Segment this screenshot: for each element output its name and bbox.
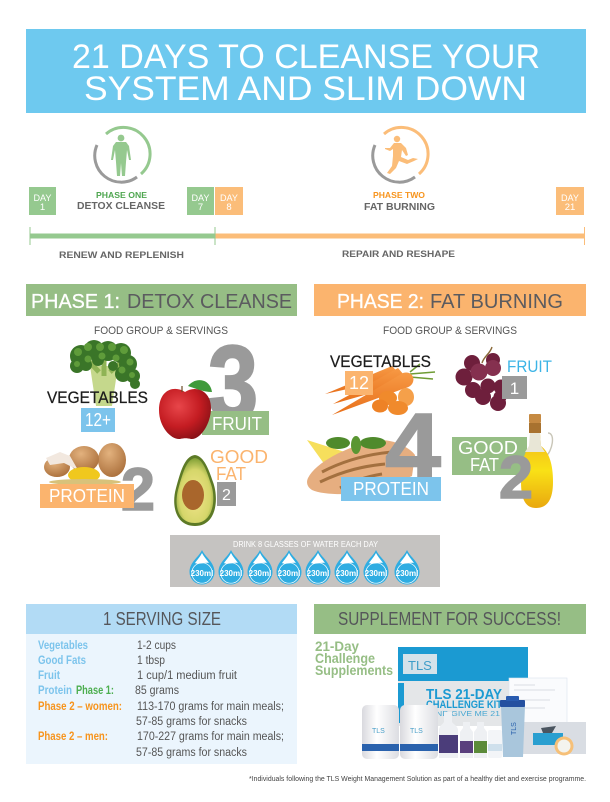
- title banner: SYSTEM AND SLIM DOWN: [84, 70, 527, 108]
- icon: water drop 4: 230ml: [278, 569, 300, 578]
- day 7 marker: DAY: [192, 193, 210, 204]
- icon: water drop 2: [218, 550, 244, 584]
- day 1 marker: [29, 187, 56, 215]
- serving table: 113-170 grams for main meals;: [137, 701, 284, 713]
- good fat label: FAT: [216, 464, 246, 484]
- icon: water drop 4: [276, 550, 302, 584]
- icon: grapes: [456, 347, 508, 411]
- icon: grilled chicken: [307, 436, 415, 494]
- product: protein tub 1: TLS: [372, 728, 385, 735]
- icon: water drop 5: [306, 550, 330, 584]
- heading: supplement: [314, 604, 586, 634]
- protein badge: PROTEIN: [353, 479, 429, 499]
- product: small bottles: [439, 712, 502, 758]
- day 1 marker: 1: [40, 202, 45, 213]
- panel: supplement for success: [314, 604, 586, 759]
- product: paperwork: [509, 678, 567, 723]
- serving table: Phase 1:: [76, 685, 114, 697]
- product: kit box: TLS 21-DAY: [426, 686, 502, 703]
- day 7 marker: 7: [198, 202, 203, 213]
- serving table: Protein: [38, 685, 72, 697]
- day 21 marker: DAY: [561, 193, 580, 204]
- icon: water drop 1: 230ml: [191, 569, 213, 578]
- serving table: Vegetables: [38, 640, 88, 652]
- day 7 marker: [187, 187, 214, 215]
- fruit badge: [202, 411, 269, 435]
- supplements caption: Supplements: [315, 662, 393, 678]
- 12+ badge: 12+: [85, 410, 111, 430]
- heading: phase 1: PHASE 1:: [31, 290, 120, 313]
- protein badge: PROTEIN: [49, 486, 125, 506]
- 12 badge: [345, 371, 373, 395]
- day 8 marker: [215, 187, 243, 215]
- heading: phase 1: [26, 284, 297, 316]
- fruit serving badge: 1: [510, 379, 519, 398]
- phase two label: PHASE TWO: [373, 190, 425, 200]
- footnote: *Individuals following the TLS Weight Management Solution as part of a healthy diet and exercise programme.: [249, 774, 586, 783]
- icon: water drop 7: [364, 550, 388, 584]
- icon: carrots: [325, 364, 435, 415]
- product: kit box: AND GIVE ME 21: [430, 711, 500, 718]
- heading: serving size: [26, 604, 297, 634]
- day 21 marker: [556, 187, 584, 215]
- serving table: 170-227 grams for main meals;: [137, 731, 284, 743]
- icon: phase two runner in ring: [373, 127, 428, 182]
- product: kit box: [398, 647, 528, 726]
- product: shaker: TLS: [511, 722, 518, 735]
- supplements caption: [315, 638, 393, 678]
- heading: phase 2: [314, 284, 586, 316]
- vegetables label: VEGETABLES: [47, 388, 148, 407]
- serving table: 1 cup/1 medium fruit: [137, 670, 238, 682]
- water caption: DRINK 8 GLASSES OF WATER EACH DAY: [233, 540, 379, 549]
- good fat serving number: 2: [499, 444, 533, 511]
- icon: broccoli: [70, 340, 140, 406]
- icon: eggs: [44, 443, 126, 485]
- product: protein tub 1: [362, 705, 399, 759]
- icon: water drop 3: [248, 550, 272, 584]
- fruit serving number: 3: [208, 325, 258, 442]
- product: booklet: [523, 722, 586, 756]
- phase two label: [364, 190, 435, 213]
- product: protein tub 2: [400, 705, 438, 759]
- heading: supplement: SUPPLEMENT FOR SUCCESS!: [338, 609, 561, 629]
- protein serving number: 4: [385, 394, 441, 501]
- heading: phase 2: PHASE 2:: [337, 290, 424, 313]
- product: shaker: [500, 696, 525, 757]
- protein serving number: 2: [121, 456, 155, 523]
- icon: apple: [159, 380, 212, 439]
- serving table: [38, 640, 284, 759]
- serving table: Good Fats: [38, 655, 86, 667]
- heading: serving size: 1 SERVING SIZE: [103, 609, 221, 629]
- serving table: Phase 2 – men:: [38, 731, 108, 743]
- good fat serving badge: 2: [222, 487, 231, 504]
- serving table: Fruit: [38, 670, 60, 682]
- 12 badge: 12: [349, 373, 369, 393]
- day 8 marker: DAY: [220, 193, 239, 204]
- panel: phase 1 detox cleanse: [26, 284, 297, 526]
- fruit badge: FRUIT: [212, 414, 262, 434]
- good fat badge: GOOD: [458, 438, 518, 458]
- supplements caption: 21-Day: [315, 638, 359, 654]
- serving table: Phase 2 – women:: [38, 701, 122, 713]
- day 1 marker: DAY: [34, 193, 52, 204]
- icon: water drop 6: [334, 550, 360, 584]
- subheading: FOOD GROUP & SERVINGS: [94, 325, 228, 337]
- good fat serving badge: [217, 482, 236, 506]
- icon: water drop 2: 230ml: [220, 569, 242, 578]
- progress bar: [30, 227, 585, 245]
- renew and replenish caption: RENEW AND REPLENISH: [59, 250, 184, 261]
- heading: phase 2: FAT BURNING: [430, 290, 563, 313]
- subheading: FOOD GROUP & SERVINGS: [383, 325, 517, 337]
- serving table: 57-85 grams for snacks: [136, 716, 247, 728]
- product: kit box: TLS: [408, 658, 432, 673]
- title banner: [26, 29, 586, 113]
- phase one label: DETOX CLEANSE: [77, 200, 165, 212]
- phase two label: FAT BURNING: [364, 201, 435, 213]
- good fat label: [210, 447, 268, 484]
- timeline: [29, 127, 585, 261]
- serving table: 57-85 grams for snacks: [136, 747, 247, 759]
- panel: serving size: [26, 604, 297, 764]
- icon: water drop 8: [394, 550, 420, 584]
- good fat badge: [452, 437, 527, 475]
- protein badge: [341, 477, 441, 501]
- fruit serving badge: [502, 376, 527, 399]
- title banner: 21 DAYS TO CLEANSE YOUR: [72, 38, 540, 76]
- serving table: 1-2 cups: [137, 640, 176, 652]
- icon: water drop 1: [190, 550, 214, 584]
- icon: oil bottle: [521, 414, 553, 508]
- icon: phase one body in ring: [95, 127, 150, 182]
- icon: water drop 3: 230ml: [249, 569, 271, 578]
- vegetables label: VEGETABLES: [330, 352, 431, 371]
- fruit label: FRUIT: [507, 357, 552, 376]
- icon: water drop 5: 230ml: [307, 569, 329, 578]
- heading: phase 1: DETOX CLEANSE: [127, 290, 292, 313]
- day 21 marker: 21: [565, 202, 575, 213]
- icon: water drop 6: 230ml: [336, 569, 358, 578]
- repair and reshape caption: REPAIR AND RESHAPE: [342, 249, 455, 260]
- panel: water intake: [170, 535, 440, 587]
- product: protein tub 2: TLS: [410, 728, 423, 735]
- good fat label: GOOD: [210, 447, 268, 467]
- product: kit box: CHALLENGE KIT: [426, 699, 502, 711]
- icon: water drop 8: 230ml: [396, 569, 418, 578]
- phase one label: PHASE ONE: [96, 190, 147, 200]
- icon: avocado: [174, 455, 216, 526]
- phase one label: [77, 190, 165, 212]
- day 8 marker: 8: [226, 202, 232, 213]
- panel: phase 2 fat burning: [307, 284, 586, 511]
- serving table: 1 tbsp: [137, 655, 165, 667]
- supplements caption: Challenge: [315, 650, 375, 666]
- icon: water drop 7: 230ml: [365, 569, 387, 578]
- good fat badge: FAT: [470, 455, 499, 475]
- serving table: 85 grams: [135, 685, 179, 697]
